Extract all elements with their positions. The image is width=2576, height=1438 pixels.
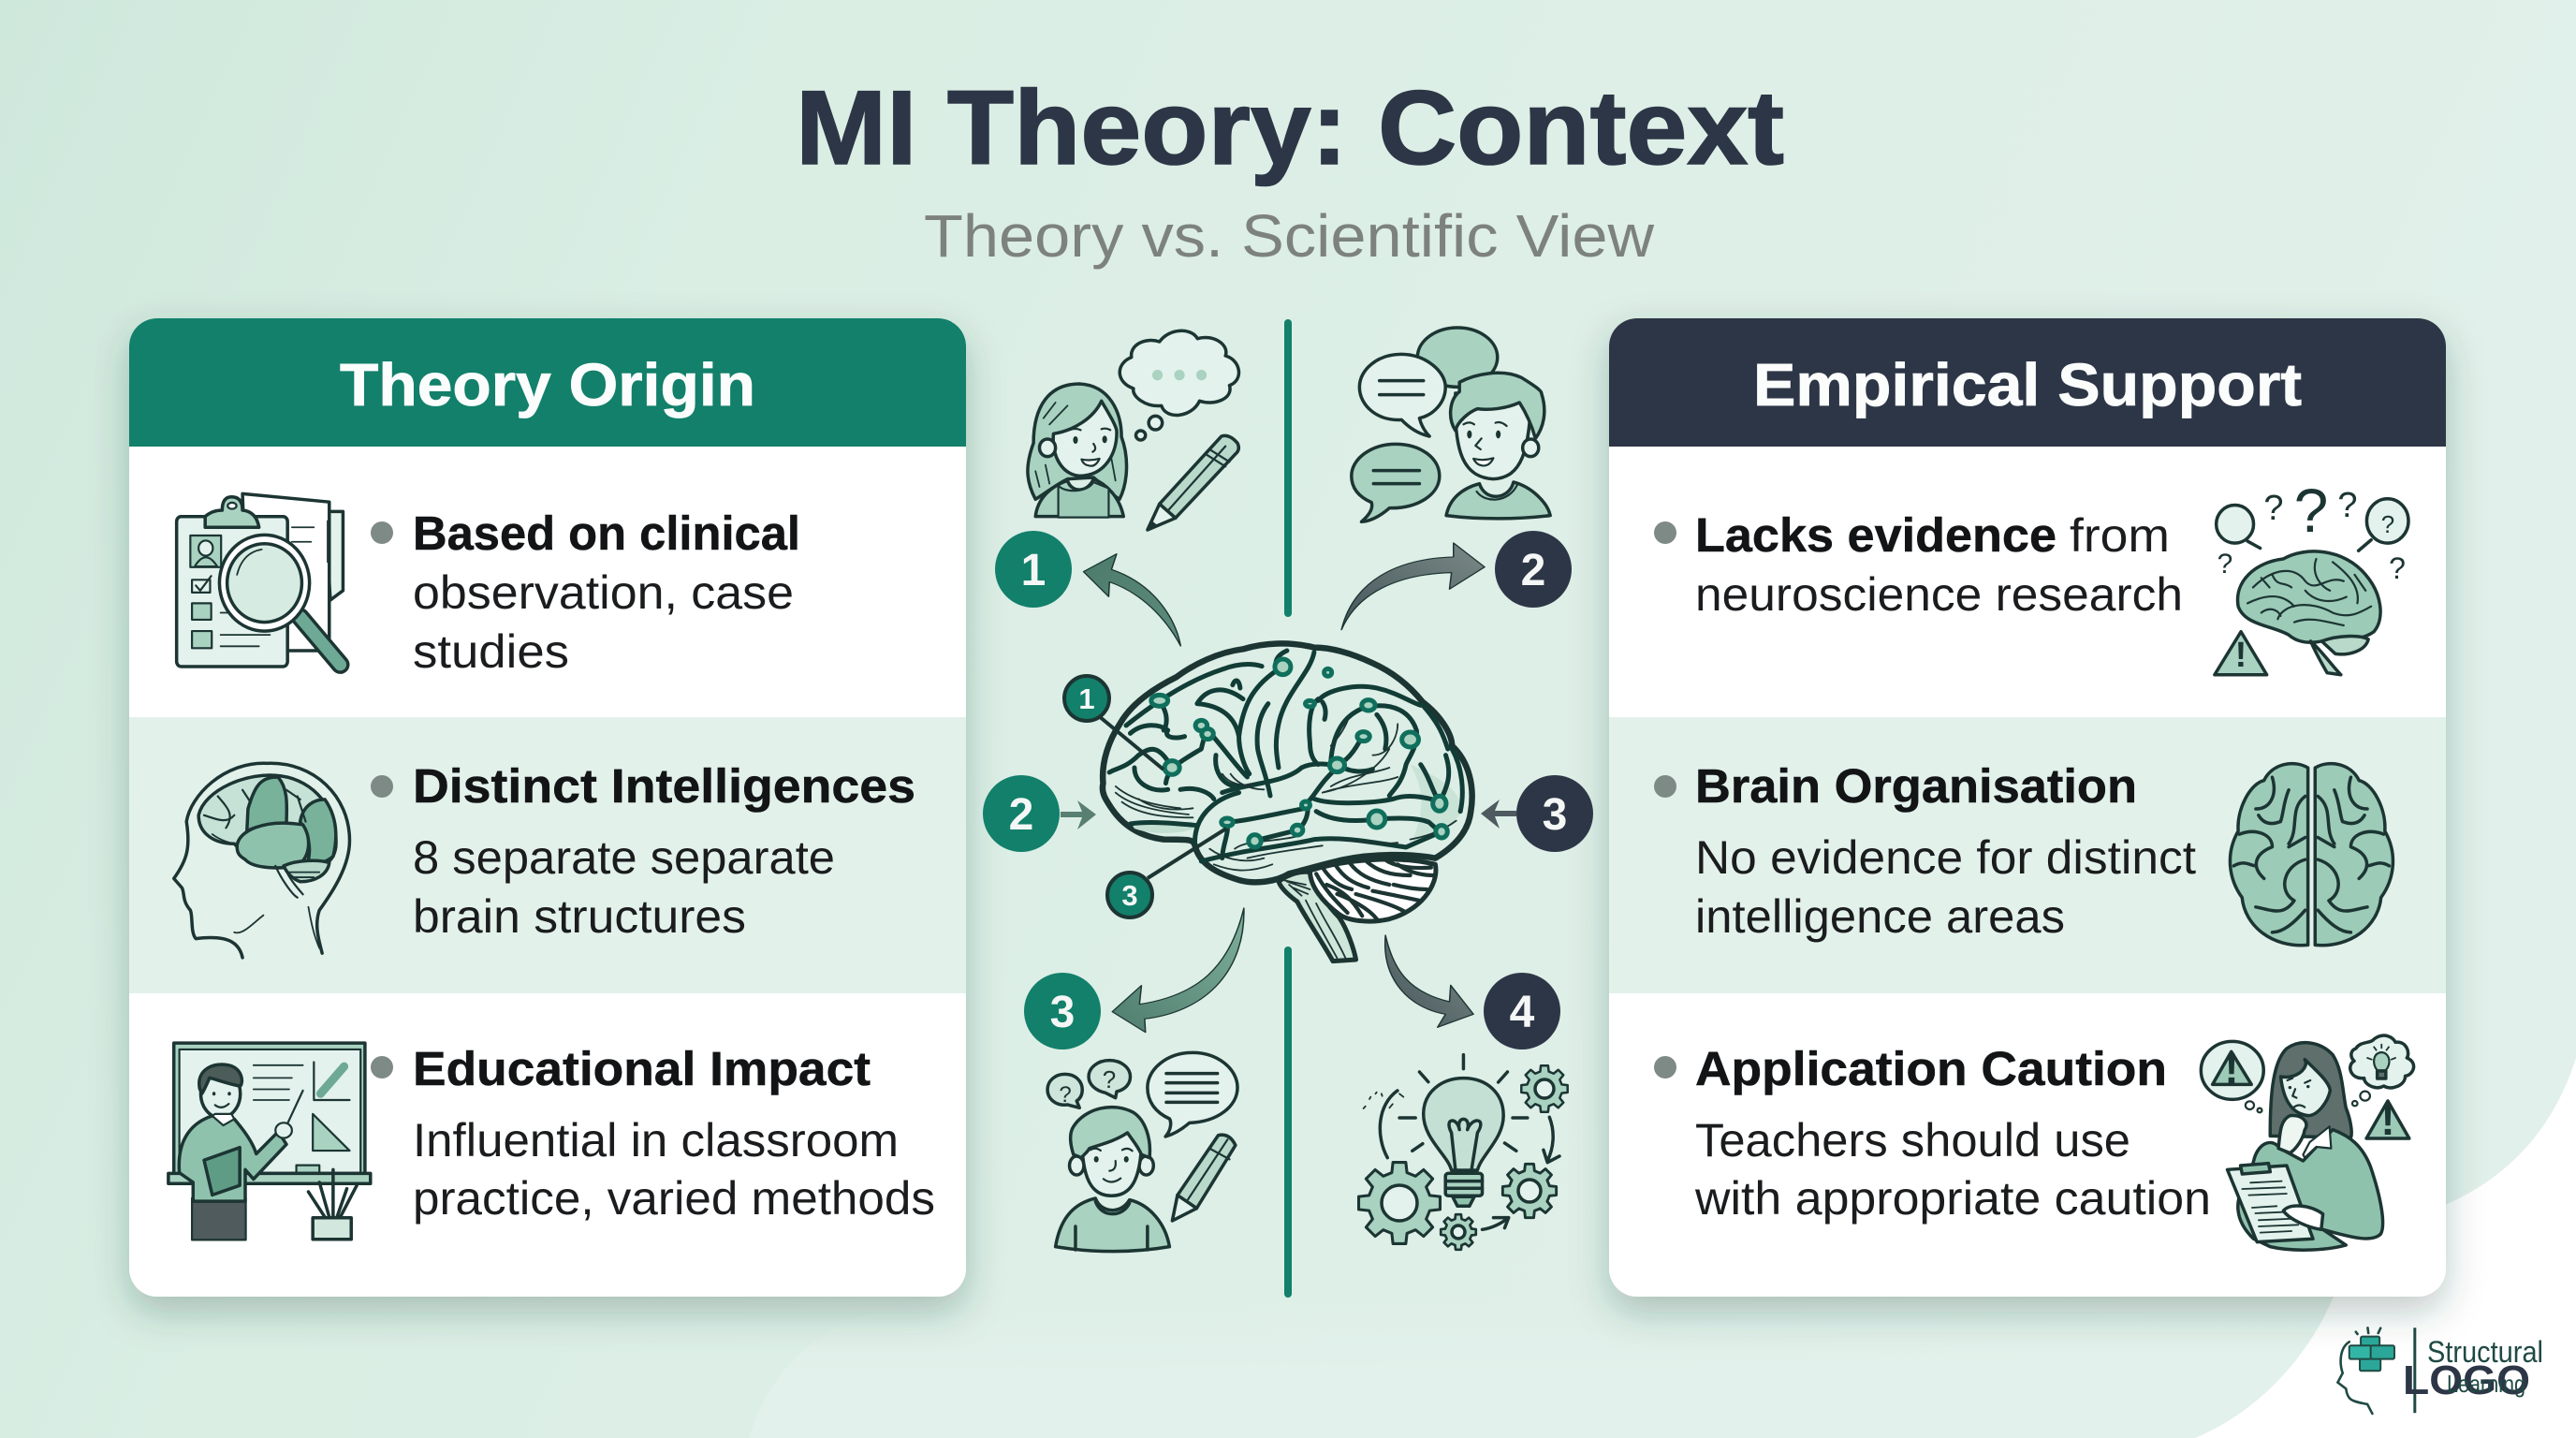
panel: theory origin — [129, 318, 966, 1297]
callout: small badge 1 with leader: 1 — [1078, 682, 1095, 715]
bullet — [1654, 775, 1676, 798]
icon: brain with question marks: ! — [2235, 636, 2247, 675]
bullet — [371, 1056, 393, 1078]
text: educational impact: Influential in classroom — [413, 1114, 899, 1167]
text: application caution: Application Caution — [1695, 1042, 2167, 1095]
text: based on clinical: observation, case — [413, 566, 794, 619]
center divider bottom — [1284, 946, 1292, 1298]
badge: side 2: 2 — [1009, 790, 1033, 840]
text: distinct intelligences: brain structures — [413, 890, 746, 943]
icon: boy with speech bubbles — [1352, 328, 1550, 521]
arrow: side right — [1481, 800, 1516, 829]
bullet — [371, 775, 393, 798]
icon: brain with question marks: ? — [2294, 476, 2328, 545]
text: lacks evidence: from — [2070, 509, 2170, 562]
badge: 3: 3 — [1050, 988, 1075, 1037]
text: lacks evidence: neuroscience research — [1695, 568, 2183, 621]
text: brain organisation — [1695, 759, 2196, 943]
icon: brain with question marks: ? — [2389, 551, 2406, 585]
icon: teacher at board — [168, 1043, 371, 1240]
arrow: brain to 3 — [1112, 908, 1244, 1033]
arrow: brain to 4 — [1385, 935, 1473, 1027]
bullet — [1654, 521, 1676, 544]
text: educational impact — [413, 1042, 935, 1225]
text: brain organisation: No evidence for distinct — [1695, 831, 2196, 884]
title: MI Theory: Context — [796, 69, 1784, 186]
icon: brain with question marks — [2215, 476, 2408, 675]
text: distinct intelligences: Distinct Intelligences — [413, 759, 915, 813]
badge: side 3: 3 — [1543, 790, 1567, 840]
badge: 2 — [1495, 531, 1572, 608]
icon: clipboard and magnifier — [177, 493, 343, 667]
icon: head with brain — [174, 763, 349, 958]
logo: structural learning: Learning — [2447, 1370, 2525, 1398]
icon: brain with question marks: ? — [2337, 486, 2358, 525]
text: educational impact: practice, varied methods — [413, 1172, 935, 1225]
callout: small badge 1 with leader — [1064, 676, 1164, 770]
logo: structural learning: LOGO — [2403, 1357, 2530, 1403]
icon: teacher with clipboard and warnings: ! — [2224, 1044, 2239, 1093]
panel header: empirical support — [1609, 318, 2446, 447]
icon: girl with thought bubble and pencil — [1028, 330, 1238, 530]
center divider top — [1284, 319, 1292, 617]
badge: 2: 2 — [1521, 546, 1545, 595]
icon: teacher with clipboard and warnings: ! — [2380, 1095, 2395, 1144]
icon: boy with questions and pencil — [1047, 1052, 1237, 1252]
panel header: theory origin — [129, 318, 966, 447]
callout: small badge 3 with leader — [1107, 829, 1226, 917]
logo: structural learning — [2337, 1328, 2543, 1414]
text: lacks evidence — [1695, 508, 2183, 621]
badge: 4: 4 — [1510, 988, 1535, 1037]
text: brain organisation: Brain Organisation — [1695, 759, 2137, 813]
text: educational impact: Educational Impact — [413, 1042, 871, 1095]
text: based on clinical: Based on clinical — [413, 506, 800, 560]
text: based on clinical: studies — [413, 625, 569, 678]
icon: brain with question marks: ? — [2263, 489, 2284, 528]
text: distinct intelligences: 8 separate separate — [413, 831, 835, 884]
icon: light bulb and gears — [1359, 1055, 1568, 1250]
text: application caution: Teachers should use — [1695, 1114, 2130, 1167]
text: based on clinical — [413, 506, 800, 678]
badge: 1: 1 — [1021, 546, 1046, 595]
logo: structural learning: Structural — [2427, 1335, 2543, 1369]
arrow: brain to 2 — [1341, 543, 1485, 630]
arrow: side left — [1061, 800, 1096, 829]
callout: small badge 3 with leader: 3 — [1121, 879, 1138, 912]
badge: 4 — [1484, 973, 1560, 1049]
text: brain organisation: intelligence areas — [1695, 890, 2065, 943]
icon: boy with questions and pencil: ? — [1103, 1065, 1116, 1093]
badge: side 3 — [1516, 775, 1593, 852]
bullet — [371, 521, 393, 544]
text: application caution — [1694, 1042, 2211, 1225]
icon: teacher with clipboard and warnings — [2201, 1035, 2414, 1250]
badge: 3 — [1024, 973, 1101, 1049]
panel header: empirical support: Empirical Support — [1753, 351, 2302, 418]
badge: side 2 — [983, 775, 1060, 852]
icon: brain with question marks: ? — [2381, 510, 2394, 538]
text: lacks evidence: Lacks evidence — [1695, 508, 2056, 562]
central brain illustration — [1103, 643, 1472, 961]
panel header: theory origin: Theory Origin — [340, 351, 755, 418]
icon: brain with question marks: ? — [2217, 549, 2232, 580]
subtitle: Theory vs. Scientific View — [924, 202, 1655, 270]
panel: empirical support — [1609, 318, 2446, 1297]
icon: boy with questions and pencil: ? — [1059, 1082, 1072, 1108]
text: application caution: with appropriate caution — [1694, 1172, 2211, 1225]
icon: brain top view — [2230, 764, 2393, 946]
text: distinct intelligences — [413, 759, 915, 943]
arrow: brain to 1 — [1084, 554, 1180, 646]
bullet — [1654, 1056, 1676, 1078]
badge: 1 — [995, 531, 1072, 608]
